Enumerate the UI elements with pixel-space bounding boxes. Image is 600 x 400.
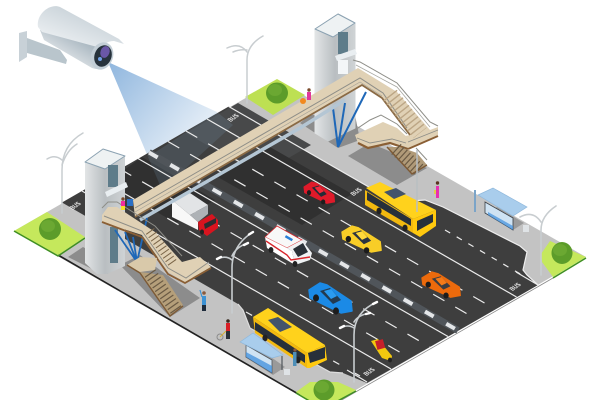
- green corner: left: [14, 212, 85, 256]
- pedestrian: man waving: [200, 290, 206, 311]
- bus lane markings: [69, 113, 523, 377]
- lamp post: middle: [217, 232, 253, 313]
- camera view beam: [108, 62, 217, 190]
- shelter bin and waiting man: [284, 348, 297, 375]
- ambulance: [265, 226, 312, 267]
- green corner: right: [541, 241, 586, 278]
- bus lane markings: BUS: [350, 187, 364, 197]
- pedestrian: woman on sidewalk: [435, 181, 439, 198]
- tower: right: [315, 14, 357, 141]
- surveillance camera: [38, 6, 124, 73]
- road markings: [82, 106, 538, 382]
- ground slab: [14, 80, 586, 400]
- bus lane markings: BUS: [363, 367, 377, 377]
- orange car: [422, 272, 460, 299]
- blue supports: left: [115, 218, 147, 262]
- shelter: lower: [240, 333, 285, 375]
- truck: [172, 193, 218, 236]
- left stairs and landing: [102, 202, 211, 316]
- camera beam over road: [148, 112, 233, 190]
- red car: [304, 182, 335, 204]
- shelter: upper: [475, 188, 529, 232]
- yellow bus: upper: [365, 182, 436, 237]
- yellow bus: lower: [253, 308, 327, 368]
- lamp post: bottom: [340, 302, 377, 382]
- camera wall mount: [19, 31, 67, 64]
- bus lane markings: BUS: [227, 113, 241, 123]
- motorbike rider: [371, 339, 392, 362]
- green corner: bottom: [296, 380, 356, 400]
- road surface: [62, 103, 538, 383]
- upper right landing: [355, 115, 408, 149]
- footbridge deck: [133, 60, 438, 220]
- bus lane markings: BUS: [69, 201, 83, 211]
- lower right stairs: [387, 147, 427, 174]
- pedestrians on bridge: [121, 88, 311, 210]
- blue car: [309, 283, 352, 315]
- lamp post: far right stair: [416, 150, 418, 212]
- cyclist with bike: [217, 319, 230, 340]
- green corner: top: [245, 79, 305, 115]
- blue supports: right: [333, 92, 366, 147]
- lamp post: left: [47, 133, 83, 213]
- lamp post: right: [520, 206, 556, 275]
- bus lane markings: BUS: [509, 282, 523, 292]
- tower: left: [85, 149, 128, 274]
- median barrier: [149, 152, 458, 330]
- lamp post: top: [227, 36, 263, 103]
- taxi: [342, 226, 381, 253]
